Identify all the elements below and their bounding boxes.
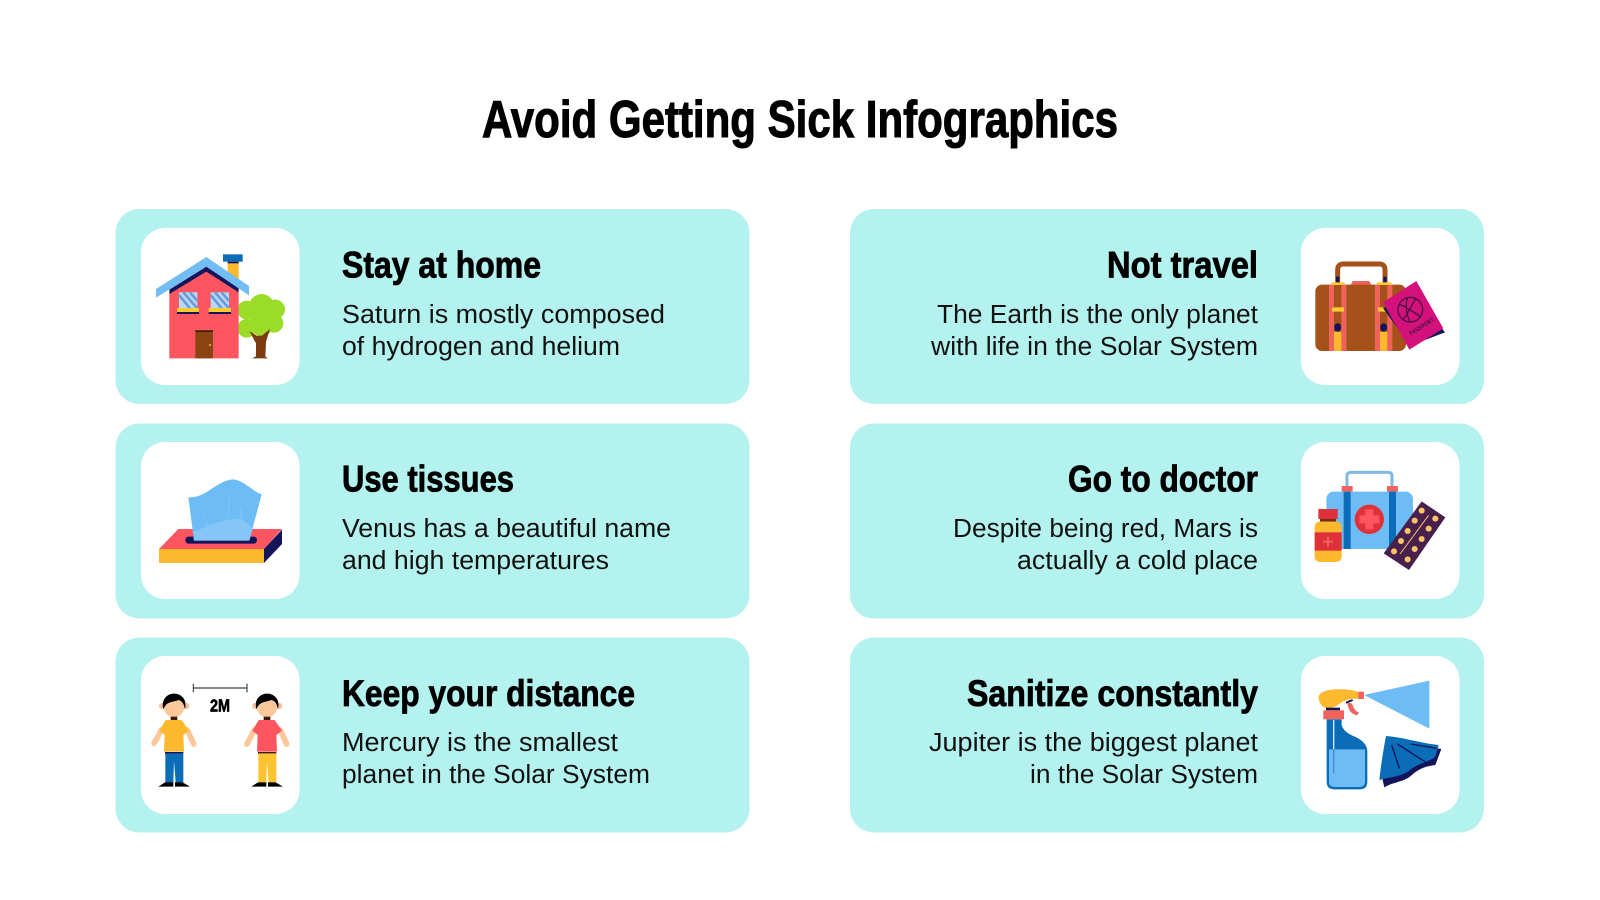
text: go to doctor <box>953 515 1258 575</box>
heading: not travel: Not travel <box>1107 244 1258 286</box>
text: use tissues: Venus has a beautiful name <box>342 515 671 543</box>
text: use tissues <box>342 515 671 575</box>
icon: house and tree <box>156 254 285 358</box>
panel: not travel <box>850 209 1484 404</box>
text: go to doctor: actually a cold place <box>1017 547 1258 575</box>
panel: sanitize constantly <box>850 638 1484 832</box>
heading: sanitize constantly: Sanitize constantly <box>967 673 1258 714</box>
text: keep your distance: planet in the Solar System <box>342 761 650 789</box>
text: use tissues: and high temperatures <box>342 547 609 575</box>
text: sanitize constantly: Jupiter is the biggest planet <box>929 729 1258 757</box>
text: sanitize constantly <box>929 729 1258 789</box>
heading: stay at home: Stay at home <box>342 244 541 286</box>
heading: use tissues: Use tissues <box>342 458 514 500</box>
heading: go to doctor: Go to doctor <box>1068 458 1258 500</box>
heading: keep your distance: Keep your distance <box>342 673 635 714</box>
icon: first aid kit, bottle and pills <box>1315 472 1445 570</box>
panel: use tissues <box>116 424 750 618</box>
text: keep your distance <box>342 729 650 789</box>
panel: keep your distance <box>116 638 750 832</box>
icon: suitcase and passport <box>1315 264 1445 351</box>
text: not travel: The Earth is the only planet <box>937 301 1258 329</box>
text: sanitize constantly: in the Solar System <box>1030 761 1258 789</box>
text: not travel <box>930 301 1258 361</box>
icon: spray bottle and cloth <box>1318 681 1441 789</box>
title: Avoid Getting Sick Infographics <box>482 91 1118 149</box>
text: go to doctor: Despite being red, Mars is <box>953 515 1258 543</box>
icon: suitcase and passport: PASSPORT <box>1408 317 1436 337</box>
text: stay at home <box>342 301 665 361</box>
text: keep your distance: Mercury is the smallest <box>342 729 618 757</box>
text: not travel: with life in the Solar System <box>930 333 1258 361</box>
panel: go to doctor <box>850 424 1484 618</box>
panel: stay at home <box>116 209 750 404</box>
icon: tissue box <box>159 479 282 563</box>
icon: two people two metres apart <box>154 684 287 787</box>
text: stay at home: of hydrogen and helium <box>342 333 620 361</box>
icon: two people two metres apart: 2M <box>210 696 230 716</box>
text: stay at home: Saturn is mostly composed <box>342 301 665 329</box>
